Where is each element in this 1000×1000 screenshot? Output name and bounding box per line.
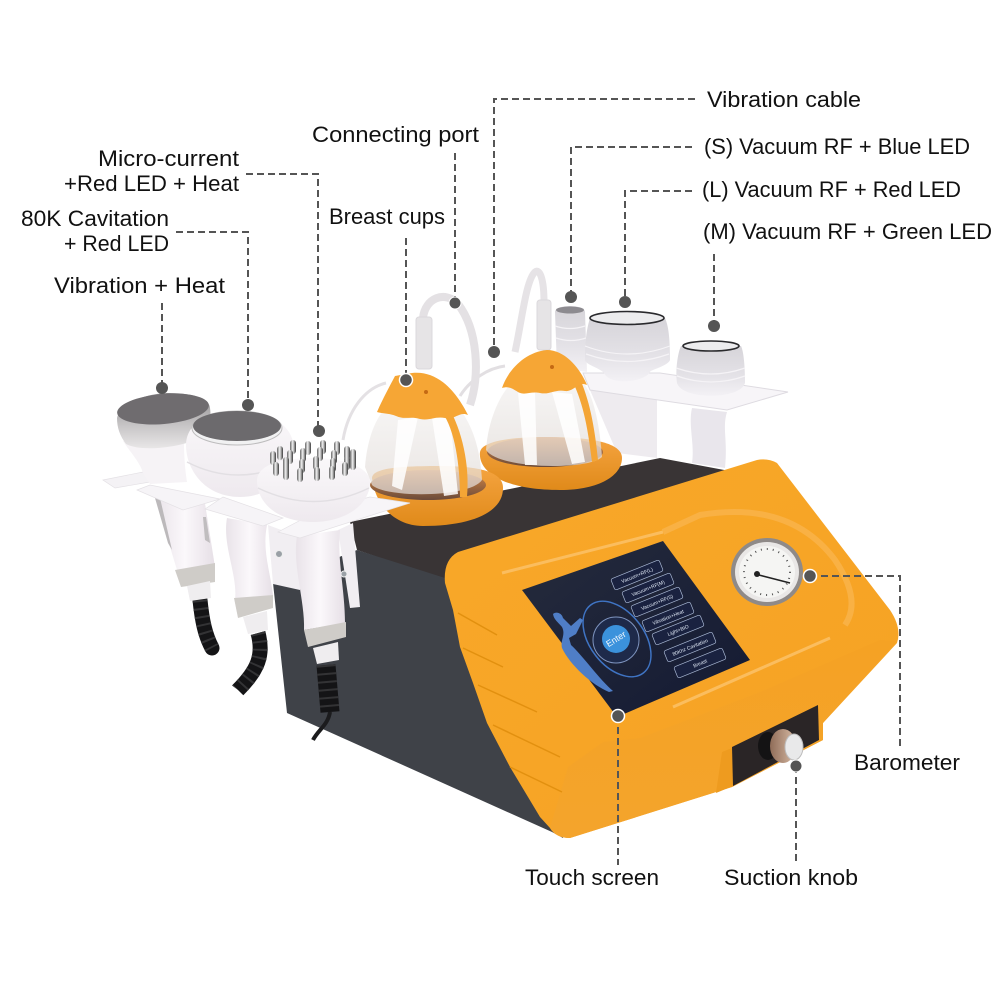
- callout: connecting port: [312, 122, 479, 309]
- panel highlight ridges: [502, 532, 830, 707]
- mounting bracket: [268, 523, 360, 608]
- middle ring: [593, 617, 639, 663]
- callout: micro-current: Micro-current: [98, 146, 239, 171]
- outer ring: [569, 588, 665, 690]
- rear holder plate: [583, 373, 788, 410]
- handpiece: micro-current: [257, 440, 410, 740]
- silver cap: [785, 734, 803, 760]
- callout: vibration and heat: Vibration + Heat: [54, 273, 225, 298]
- connector tube left: [416, 317, 432, 369]
- callout: vibration cable: Vibration cable: [707, 87, 861, 112]
- screen panel: [522, 541, 750, 717]
- callout: 80K cavitation: [21, 206, 254, 411]
- cabinet: dark box: [273, 458, 735, 838]
- connector tube right: [537, 300, 551, 350]
- vacuum hose left: [423, 297, 476, 405]
- cabinet top face: [350, 458, 735, 580]
- side ribs: [458, 613, 562, 792]
- S vacuum RF head: [555, 306, 587, 372]
- knob plate: [732, 705, 819, 786]
- callout: barometer: Barometer: [854, 750, 960, 775]
- vacuum hose right: [515, 271, 544, 352]
- menu buttons: Vibration+Heat: [652, 609, 685, 627]
- handle: [226, 518, 273, 600]
- callout: S vacuum RF: [565, 134, 970, 303]
- suction knob: [732, 705, 819, 786]
- enter button: Enter: [604, 629, 628, 649]
- callout: M vacuum RF: [703, 219, 992, 332]
- callout: 80K cavitation: 80K Cavitation: [21, 206, 169, 231]
- handle: [296, 530, 345, 630]
- L vacuum RF head: [585, 312, 670, 381]
- callout: touch screen: [525, 710, 659, 890]
- menu buttons: Vacuum+RF(L): [621, 567, 654, 585]
- ring: [304, 622, 346, 647]
- callout: barometer: [804, 570, 960, 775]
- cable: [200, 600, 212, 648]
- handpiece: 80K cavitation: [186, 411, 294, 690]
- head body: [257, 458, 370, 522]
- callout: S vacuum RF: (S) Vacuum RF + Blue LED: [704, 134, 970, 159]
- base right: [480, 437, 622, 490]
- ring: [175, 563, 215, 587]
- silver head: [117, 393, 211, 448]
- menu buttons: 80Khz Cavitation: [672, 638, 709, 658]
- knob recess: [716, 748, 733, 793]
- cable: [238, 633, 260, 690]
- rear holder back panel: [590, 390, 657, 458]
- menu buttons: Vacuum+RF(M): [631, 579, 666, 598]
- touch screen: [522, 541, 750, 717]
- body silhouette: [553, 613, 613, 692]
- orange control console: [445, 459, 898, 838]
- plate rear: [103, 472, 150, 488]
- breast cup right: [460, 271, 622, 490]
- callout: 80K cavitation: + Red LED: [64, 231, 169, 256]
- barometer gauge: [731, 538, 803, 606]
- M vacuum RF head: [676, 341, 745, 396]
- callouts: [21, 87, 992, 890]
- menu buttons: Vacuum+RF(S): [640, 594, 675, 612]
- base left: [372, 466, 503, 526]
- callout: M vacuum RF: (M) Vacuum RF + Green LED: [703, 219, 992, 244]
- dome right: [486, 385, 602, 466]
- cap left: [377, 373, 468, 419]
- neck: [123, 441, 187, 484]
- console shell: [445, 459, 898, 838]
- cabinet side face: [273, 550, 563, 838]
- callout: breast cups: [329, 204, 445, 386]
- callout: L vacuum RF: [619, 177, 961, 308]
- bracket screw: [276, 550, 282, 558]
- menu buttons: Breast: [693, 658, 709, 669]
- menu buttons: Light+BIO: [667, 624, 690, 638]
- machine illustration: [103, 271, 898, 838]
- callout: touch screen: Touch screen: [525, 865, 659, 890]
- callout: L vacuum RF: (L) Vacuum RF + Red LED: [702, 177, 961, 202]
- metal disc: [192, 411, 282, 445]
- callout: micro-current: [64, 146, 325, 437]
- callout: breast cups: Breast cups: [329, 204, 445, 229]
- callout: suction knob: Suction knob: [724, 865, 858, 890]
- rear holder post: [691, 408, 727, 468]
- knurled collar: [770, 729, 796, 763]
- plate: [278, 497, 410, 538]
- head body: [186, 411, 294, 497]
- callout: vibration cable: [488, 87, 861, 358]
- chrome pins: [270, 440, 356, 482]
- console lower skirt: [550, 640, 897, 838]
- enter button: [602, 625, 630, 653]
- handle: [155, 497, 215, 570]
- dome left: [365, 410, 482, 494]
- ring: [234, 595, 273, 618]
- breast cup left: [343, 297, 503, 526]
- knob base: [758, 732, 778, 760]
- callout: vibration and heat: [54, 273, 225, 394]
- bracket right panel: [338, 523, 360, 608]
- plate: [205, 497, 283, 526]
- cable: [326, 665, 330, 712]
- vibration cable left: [343, 383, 386, 440]
- rear holder with plate: [583, 373, 788, 468]
- cap right: [502, 350, 587, 394]
- callout: micro-current: +Red LED + Heat: [64, 171, 239, 196]
- bracket centre panel: [268, 525, 300, 590]
- callout: connecting port: Connecting port: [312, 122, 479, 147]
- menu buttons: [611, 560, 726, 678]
- plate front: [137, 485, 220, 510]
- bracket right screw: [341, 571, 347, 577]
- vibration cable right: [460, 366, 505, 396]
- handpiece: vibration and heat: [103, 390, 220, 648]
- callout: suction knob: [724, 760, 858, 890]
